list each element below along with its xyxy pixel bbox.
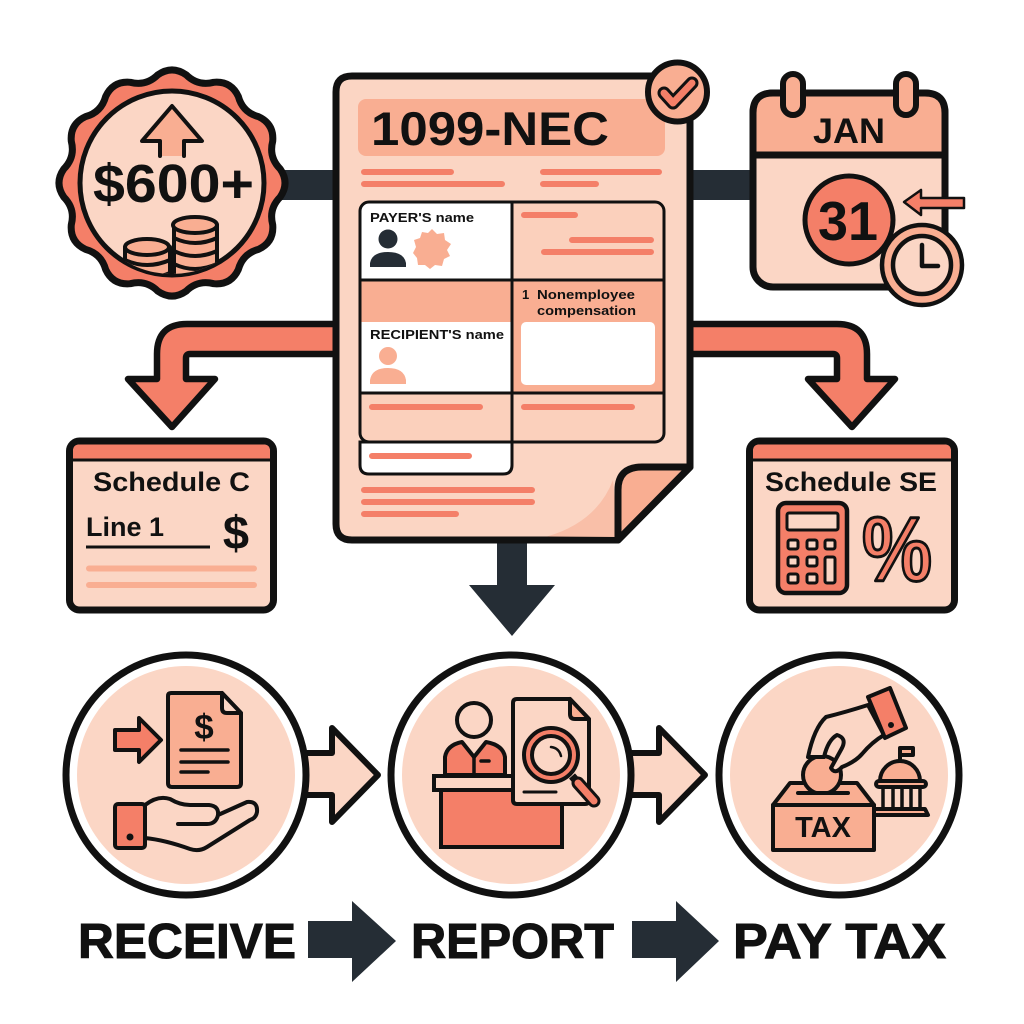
icon: document <box>513 699 589 804</box>
line 1 label: Line 1 <box>86 512 164 542</box>
form table <box>360 202 664 474</box>
month label: JAN <box>813 112 885 151</box>
box 1 nonemployee compensation <box>522 287 636 318</box>
icon: calculator <box>778 503 847 593</box>
badge: $600+ threshold <box>59 70 285 296</box>
arrow: report to pay tax <box>628 728 705 822</box>
connector: form to calendar <box>685 170 757 200</box>
date: 31 <box>805 176 893 264</box>
icon: document with dollar: $ <box>194 708 214 747</box>
form title: 1099-NEC <box>371 102 609 155</box>
lower text lines <box>364 407 632 514</box>
card lines <box>89 568 254 585</box>
step circle: receive <box>66 655 306 895</box>
box 1 nonemployee compensation: Nonemployee <box>537 287 635 302</box>
card: Schedule C <box>70 441 274 610</box>
arrow: report to pay tax label <box>632 901 719 982</box>
arrow: form down to process <box>469 535 555 636</box>
icon: tax box: TAX <box>795 812 852 844</box>
arrow: form to Schedule C <box>128 324 340 427</box>
header band <box>358 99 665 156</box>
line 1 label <box>86 512 210 547</box>
icon: up arrow <box>142 106 202 156</box>
connector: badge to form <box>275 170 340 200</box>
icon: incoming arrow <box>115 718 161 762</box>
calendar: Jan 31 deadline <box>753 74 964 305</box>
icon: capitol building <box>872 748 928 815</box>
icon: coin stacks <box>125 217 217 285</box>
arrow pointing at date <box>904 190 964 215</box>
icon: open hand <box>115 798 257 850</box>
icon: document with dollar <box>168 693 241 787</box>
icon: hand dropping coin <box>808 688 906 771</box>
icon: clock <box>882 225 962 305</box>
date: 31: 31 <box>818 190 878 252</box>
icon: verified check <box>648 62 707 122</box>
recipient cell: RECIPIENT'S name <box>370 327 504 342</box>
icon: person <box>445 703 505 775</box>
step circle: report <box>391 655 631 895</box>
recipient cell <box>370 327 504 384</box>
payer cell <box>370 210 474 269</box>
arrow: receive to report label <box>308 901 396 982</box>
folded corner <box>547 467 690 540</box>
card title: Schedule SE <box>765 467 937 497</box>
percent sign: % <box>862 499 932 601</box>
calendar rings <box>783 74 916 115</box>
label: pay tax: PAY TAX <box>733 915 946 969</box>
box 1 nonemployee compensation: compensation <box>537 303 636 318</box>
arrow: form to Schedule SE <box>685 324 895 427</box>
step circle: pay tax <box>719 655 959 895</box>
icon: tax box <box>773 756 874 850</box>
value: $600+: $600+ <box>93 154 254 214</box>
box 1 nonemployee compensation: 1 <box>522 287 529 302</box>
card: Schedule SE <box>750 441 954 610</box>
label: report: REPORT <box>411 915 614 969</box>
payer cell: PAYER'S name <box>370 210 474 225</box>
icon: magnifying glass <box>524 728 594 801</box>
icon: desk <box>434 776 562 847</box>
label: receive: RECEIVE <box>78 915 296 969</box>
card title: Schedule C <box>93 467 250 497</box>
dollar sign: $ <box>223 506 249 559</box>
panel: 1099-NEC form <box>336 62 707 540</box>
payer cell lines <box>524 215 651 252</box>
header text lines <box>364 172 659 184</box>
arrow: receive to report <box>300 728 378 822</box>
